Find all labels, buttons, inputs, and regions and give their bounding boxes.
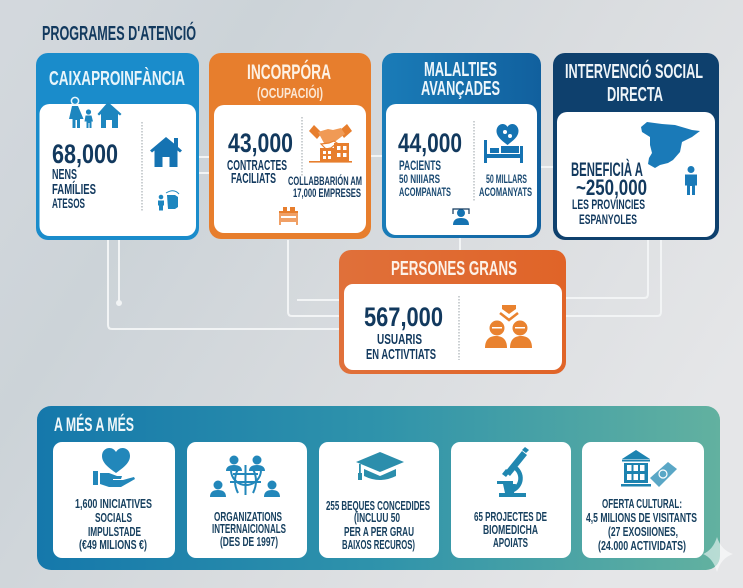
divider — [301, 117, 303, 177]
text: PER A PER GRAU — [344, 524, 414, 539]
title: PROGRAMES D'ATENCIÓ — [42, 21, 196, 45]
card: iniciatives socials — [53, 442, 175, 558]
stat label — [227, 157, 287, 187]
text: SOCIALS — [95, 510, 132, 525]
stat: 68,000: 68,000 — [52, 139, 118, 169]
stat label: PACIENTS — [399, 157, 441, 173]
heading: A més a més: A MÉS A MÉS — [54, 414, 134, 436]
stat label — [366, 331, 436, 363]
heading: Malalties avançades: AVANÇADES — [421, 78, 500, 100]
collaboration note: COLLABBARIÓN AM — [288, 173, 362, 188]
card: projectes biomedicina — [451, 442, 571, 558]
icon: map of Spain — [641, 122, 700, 168]
icon: elderly pair and heart — [485, 305, 532, 348]
text: 65 PROJECTES DE — [474, 509, 547, 524]
divider — [141, 122, 143, 212]
text: BIOMEDICHA — [483, 522, 538, 537]
text — [75, 496, 152, 552]
panel: CaixaProinfància — [36, 53, 199, 240]
panel: Persones grans — [339, 250, 566, 374]
icon: graduation cap — [356, 452, 404, 480]
text: (INCLUU 50 — [354, 510, 400, 525]
icon: house — [150, 137, 182, 167]
heading: Malalties avançades — [421, 59, 500, 100]
note: 50 millars: ACOMANYATS — [479, 185, 532, 199]
stat: beneficià a 250,000 — [571, 159, 647, 227]
icon: microscope — [497, 447, 529, 497]
icon: person — [453, 209, 469, 225]
stat: beneficià a 250,000: ESPANYOLES — [579, 211, 637, 227]
text: APOIATS — [493, 535, 528, 550]
panel: Incorpóra — [209, 53, 371, 239]
text — [326, 498, 430, 552]
text — [474, 509, 547, 550]
stat label: FACILIATS — [231, 170, 276, 187]
stat label — [399, 157, 451, 199]
panel: Intervenció social directa — [553, 53, 719, 240]
icon: mother, child and house — [69, 97, 122, 128]
panel: Malalties avançades — [382, 53, 541, 238]
heading: Intervenció social directa: DIRECTA — [607, 84, 663, 106]
card: beques — [319, 442, 439, 558]
text: (27 EXOSIIONES, — [608, 524, 678, 539]
icon: globe and people — [210, 456, 280, 497]
collaboration note: 17,000 EMPRESES — [293, 186, 361, 200]
stat label: FAMÍLIES — [52, 181, 96, 198]
note: 50 millars — [479, 172, 532, 199]
stat: beneficià a 250,000: LES PROVINCIES — [572, 196, 645, 212]
icon: person — [685, 166, 697, 195]
icon: museum and ticket — [621, 450, 677, 487]
text: INTERNAICIONALS — [212, 521, 286, 536]
text: (24.000 ACTIVIDATS) — [598, 538, 686, 553]
icon: heart over bed — [484, 124, 523, 163]
text: OFERTA CULTURAL: — [602, 496, 682, 511]
stat label: NENS — [52, 166, 77, 183]
text — [212, 509, 286, 549]
note: 50 millars: 50 MILLARS — [486, 172, 527, 186]
stat label: ATESOS — [52, 195, 85, 211]
heading: Incorpóra: INCORPÓRA — [247, 60, 331, 84]
icon: handshake and buildings — [309, 124, 352, 163]
text: 1,600 INICIATIVES — [75, 496, 152, 511]
heading: Persones grans: PERSONES GRANS — [391, 258, 517, 280]
stat label: USUARIS — [377, 331, 422, 348]
stat: 43,000: 43,000 — [228, 128, 293, 158]
text: 255 BEQUES CONCEDIDES — [326, 498, 430, 513]
stat label: ACOMPANATS — [399, 185, 451, 199]
divider — [458, 296, 460, 360]
text: (DES DE 1997) — [220, 534, 278, 549]
text: ORGANIZATIONS — [214, 509, 282, 524]
heading: Incorpóra: (OCUPACIÓI) — [257, 84, 323, 102]
heading: Intervenció social directa — [565, 59, 703, 106]
text: IMPULSTADE — [88, 524, 141, 539]
icon: family support — [158, 191, 179, 210]
text: (€49 MILIONS €) — [79, 537, 147, 552]
stat: 567,000: 567,000 — [364, 302, 443, 332]
heading: CaixaProinfància: CAIXAPROINFÀNCIA — [49, 67, 185, 90]
text: BAIXOS RECUROS) — [342, 537, 415, 552]
heading: Malalties avançades: MALALTIES — [424, 59, 497, 81]
stat label: 50 NIIIARS — [399, 172, 440, 186]
collaboration note — [288, 173, 362, 200]
stat label: CONTRACTES — [227, 157, 287, 174]
stat: beneficià a 250,000: BENEFICIÀ A — [571, 159, 643, 181]
panel: A més a més — [37, 406, 720, 570]
text — [586, 496, 697, 553]
card: oferta cultural — [582, 442, 704, 558]
stat label — [52, 166, 96, 211]
icon: heart in hand — [93, 448, 135, 487]
icon: small desk — [279, 207, 298, 225]
stat: 44,000: 44,000 — [398, 128, 462, 158]
divider — [473, 121, 475, 201]
stat: beneficià a 250,000: ~250,000 — [576, 175, 647, 200]
heading: Incorpóra — [247, 60, 331, 102]
stat label: EN ACTIVTIATS — [366, 346, 436, 363]
card: organitzacions internacionals — [187, 442, 307, 558]
icon: sparkle — [703, 537, 733, 572]
